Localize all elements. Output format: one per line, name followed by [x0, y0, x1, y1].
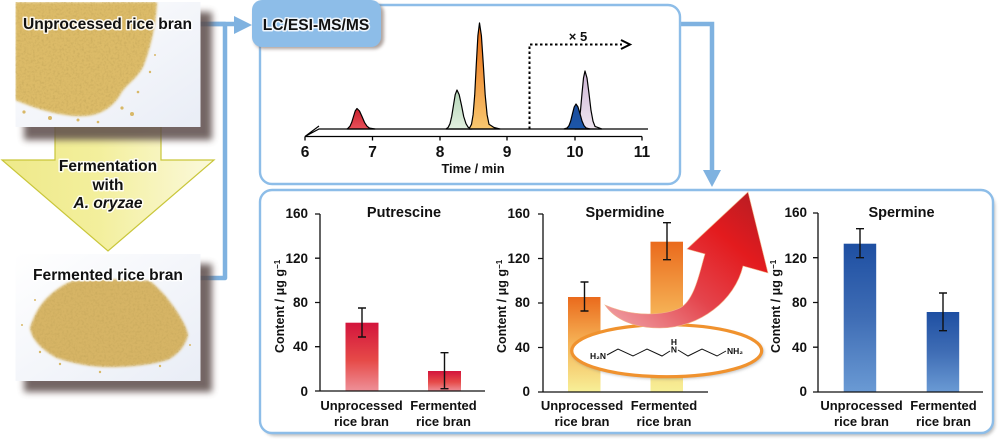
- x labels: Fermented: [410, 398, 477, 413]
- chart title: Spermidine: [586, 205, 664, 221]
- x axis labels: 8: [436, 144, 445, 161]
- connector: LC to content panel: [680, 24, 712, 172]
- arrowhead: to content panel: [703, 170, 721, 187]
- peak: blue: [564, 104, 590, 129]
- peak: green: [446, 90, 472, 129]
- x labels: [320, 398, 477, 429]
- label: fermentation: [59, 158, 157, 212]
- label: fermented: Fermented rice bran: [33, 267, 183, 284]
- label: LC/ESI-MS/MS: [252, 0, 384, 49]
- bars: [346, 323, 378, 391]
- error bars: [856, 229, 947, 331]
- y axis title: −1: [769, 259, 778, 269]
- label: fermentation: A. oryzae: [73, 195, 143, 212]
- x labels: Unprocessed: [541, 398, 623, 413]
- panel: LC/MS chromatogram: [260, 5, 680, 184]
- x labels: Unprocessed: [820, 398, 903, 413]
- x axis labels: [301, 144, 651, 161]
- y tick labels: 40: [515, 340, 530, 355]
- molecule callout: spermidine structure: [572, 325, 764, 379]
- error bars: [580, 223, 671, 311]
- y tick labels: 80: [792, 295, 807, 310]
- x labels: Unprocessed: [320, 398, 403, 413]
- peak: orange: [469, 23, 500, 129]
- x labels: [541, 398, 697, 429]
- molecule callout: spermidine structure: N: [671, 344, 677, 354]
- chart title: Spermine: [868, 205, 935, 221]
- x axis labels: 9: [503, 144, 512, 161]
- molecule callout: spermidine structure: NH₂: [727, 346, 743, 356]
- y tick labels: 80: [293, 295, 308, 310]
- chart: Putrescine: [273, 205, 485, 429]
- peak: purple: [575, 71, 602, 129]
- big red arrow: [605, 192, 768, 328]
- x labels: [820, 398, 977, 429]
- y axis title: −1: [273, 259, 282, 269]
- y tick labels: 160: [285, 206, 308, 221]
- arrow: fermentation: [2, 120, 214, 251]
- photo: unprocessed rice bran: [15, 2, 212, 140]
- bars: [568, 297, 600, 392]
- label: LC/ESI-MS/MS: LC/ESI-MS/MS: [263, 17, 369, 34]
- y tick labels: 80: [515, 295, 530, 310]
- x labels: Fermented: [910, 398, 977, 413]
- x labels: Fermented: [631, 398, 697, 413]
- x labels: rice bran: [416, 414, 471, 429]
- y axis title: Content / μg g: [495, 269, 509, 353]
- x axis labels: 11: [634, 144, 651, 161]
- y axis title: −1: [495, 259, 504, 269]
- x axis: [305, 136, 642, 140]
- molecule callout: spermidine structure: H₂N: [590, 351, 606, 361]
- panel: polyamine content: [260, 190, 995, 436]
- x labels: rice bran: [637, 414, 692, 429]
- y tick labels: 160: [784, 205, 807, 220]
- y tick labels: 0: [300, 384, 308, 399]
- molecule callout: spermidine structure: H: [671, 337, 677, 347]
- x axis title: Time / min: [441, 161, 505, 176]
- y axis title: Content / μg g: [769, 269, 783, 353]
- x axis labels: 6: [301, 144, 310, 161]
- x axis labels: 7: [368, 144, 377, 161]
- y tick labels: 120: [285, 251, 308, 266]
- x labels: rice bran: [555, 414, 610, 429]
- y tick labels: 120: [507, 251, 530, 266]
- x labels: rice bran: [834, 414, 889, 429]
- y tick labels: 0: [522, 384, 530, 399]
- y tick labels: 160: [507, 206, 530, 221]
- x axis labels: 10: [566, 144, 584, 161]
- error bars: [358, 308, 448, 389]
- photo: fermented rice bran: [16, 254, 212, 392]
- y tick labels: 0: [799, 384, 807, 399]
- y tick labels: 120: [784, 251, 807, 266]
- chart title: Putrescine: [367, 205, 441, 221]
- structure: [607, 349, 726, 356]
- chart: Spermine: [769, 205, 983, 429]
- arrowhead: into LC box: [234, 16, 252, 34]
- y tick labels: 40: [792, 340, 807, 355]
- axes: [538, 214, 708, 392]
- x labels: rice bran: [916, 414, 971, 429]
- bars: [844, 244, 876, 392]
- y tick labels: [507, 206, 530, 399]
- chromatogram: [301, 23, 651, 176]
- x labels: rice bran: [334, 414, 389, 429]
- label: fermentation: with: [92, 177, 124, 194]
- axes: [813, 213, 983, 392]
- connector: samples to LC: [200, 24, 236, 278]
- label: unprocessed: Unprocessed rice bran: [23, 16, 192, 33]
- y tick labels: [285, 206, 308, 399]
- y tick labels: 40: [293, 339, 308, 354]
- axes: [315, 214, 485, 391]
- chart: Spermidine: [495, 205, 708, 429]
- ×5 dashed marker: × 5: [569, 29, 587, 44]
- y axis title: Content / μg g: [273, 269, 287, 353]
- peak: red: [347, 108, 375, 129]
- y tick labels: [784, 205, 807, 399]
- ×5 dashed marker: [530, 29, 630, 129]
- label: fermentation: Fermentation: [59, 158, 157, 175]
- arrow: into LC box: [200, 22, 236, 26]
- baseline: [305, 126, 648, 136]
